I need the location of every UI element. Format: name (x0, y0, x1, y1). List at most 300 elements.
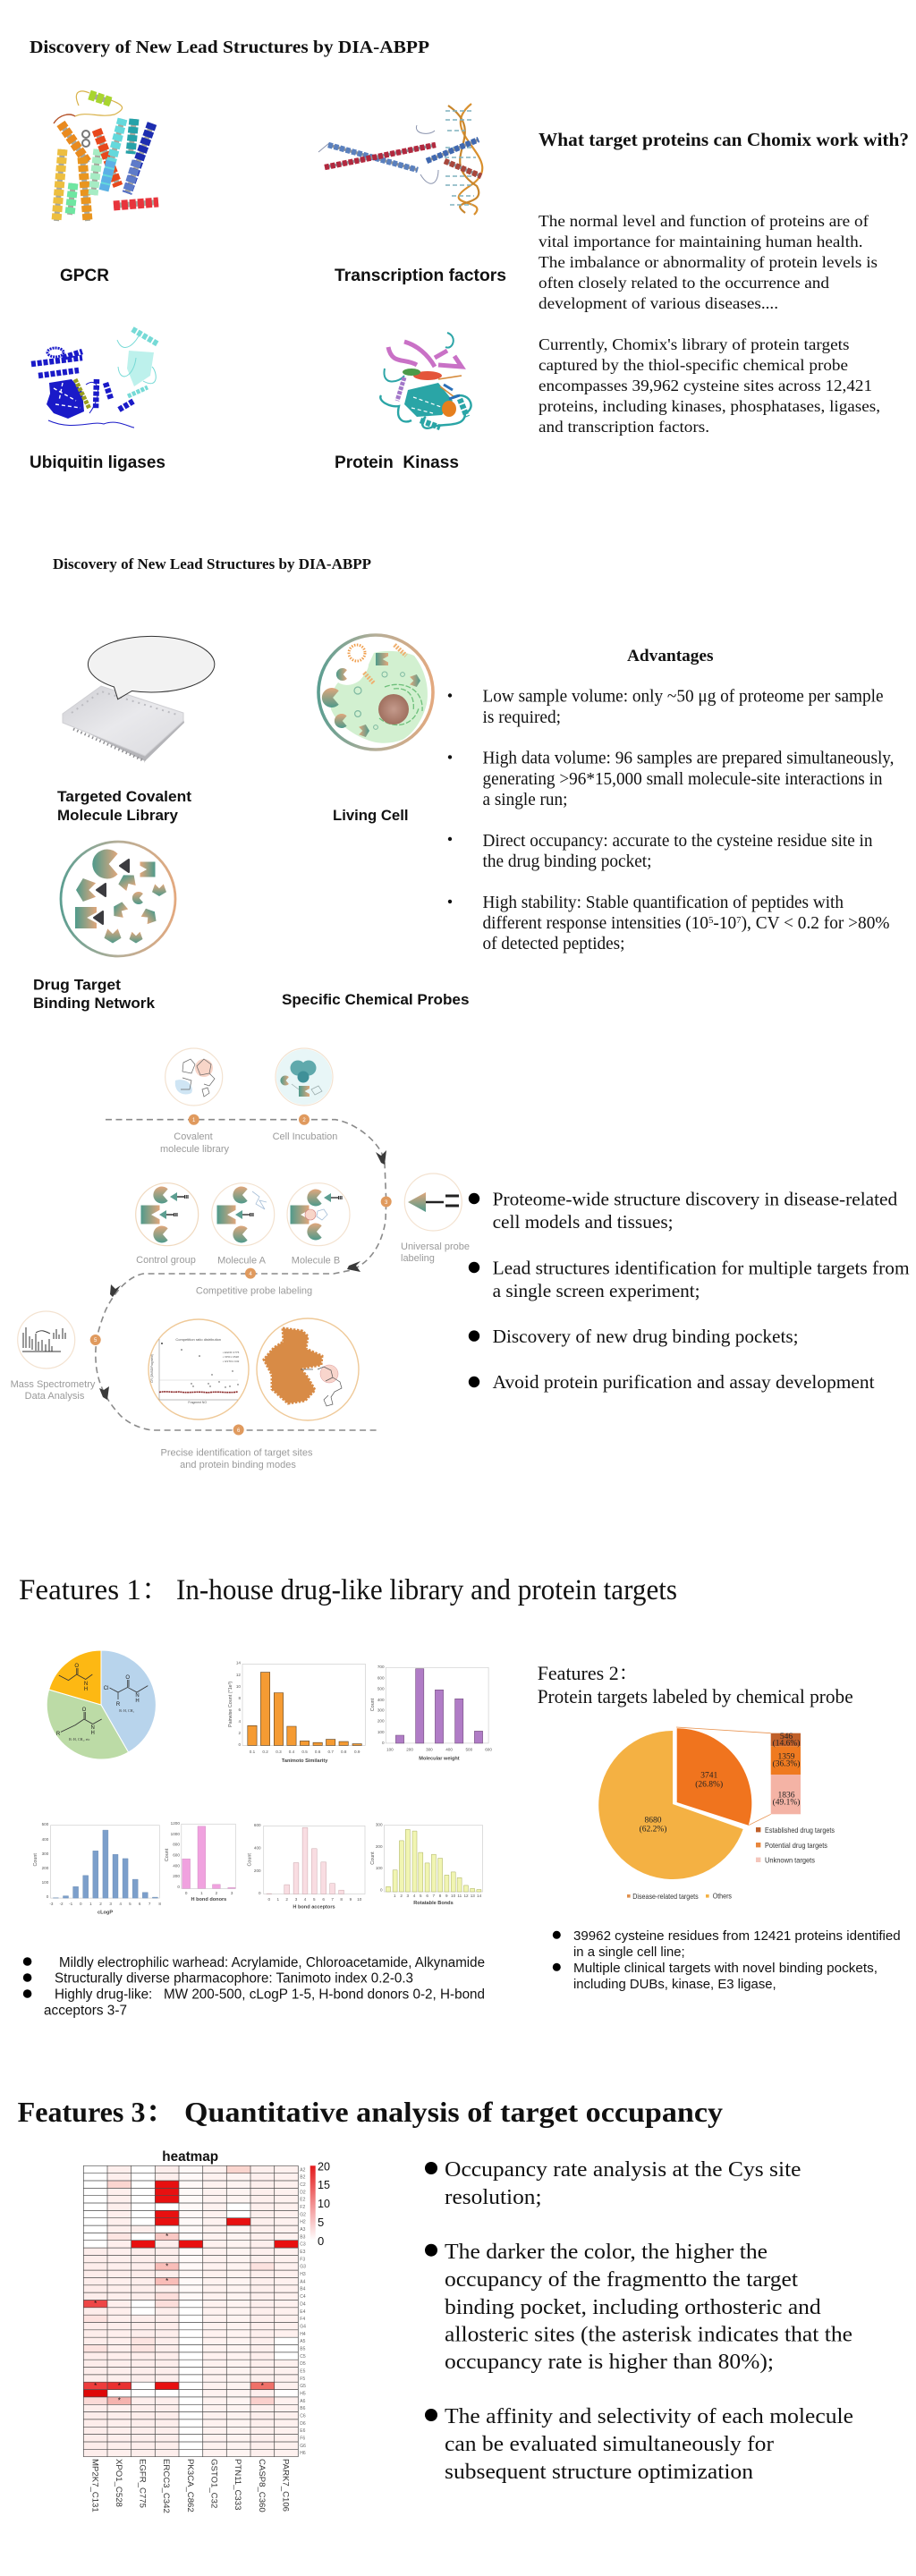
pie chart: protein targets: 8680 (644, 1816, 662, 1825)
heatmap row labels: D4 (300, 2301, 306, 2307)
list: advantages: High data volume: 96 samples are prepared simultaneously, (483, 750, 895, 767)
list: advantages: Low sample volume: only ~50 μg of proteome per sample (483, 687, 884, 707)
bar chart: rotatable bonds: 200 (376, 1844, 383, 1849)
heatmap row labels: B3 (300, 2234, 306, 2240)
pie chart: warhead types: H (91, 1731, 95, 1736)
text block: protein function paragraph: often closely related to the occurrence and (539, 274, 829, 292)
bar chart: molecular weight: 100 (386, 1748, 394, 1751)
label: GPCR: GPCR (60, 267, 109, 285)
step 6: competition ratio chart: CR (DMSO/Fragment) (150, 1354, 154, 1383)
icon: drug target binding network (61, 842, 175, 956)
heatmap column labels: GSTO1_C32 (209, 2459, 218, 2508)
bar chart: H bond donors: 400 (173, 1864, 180, 1868)
list: library properties (23, 1955, 485, 2018)
list: advantages: different response intensities (10 (483, 914, 710, 933)
bar chart: tanimoto similarity: Tanimoto Similarity (282, 1758, 328, 1764)
bar chart: H bond acceptors: 0 (259, 1891, 261, 1895)
heatmap column labels: CASP8_C360 (257, 2459, 267, 2512)
heatmap column labels: PK3CA_C862 (185, 2459, 195, 2512)
bar chart: cLogP: 200 (42, 1866, 49, 1870)
bar chart: rotatable bonds: 1 (394, 1894, 396, 1898)
heatmap row labels: G4 (300, 2324, 306, 2329)
bar chart: tanimoto similarity: 0.3 (276, 1750, 282, 1754)
pie chart: warhead types (47, 1650, 156, 1759)
bar chart: molecular weight: 200 (406, 1748, 413, 1751)
heatmap cells (83, 2165, 298, 2457)
list: advantages: of detected peptides; (483, 935, 624, 953)
step 3: universal probe labeling (404, 1174, 462, 1231)
bar chart: H bond acceptors: 200 (254, 1868, 261, 1873)
heatmap row labels: H5 (300, 2392, 306, 2397)
heatmap row labels: E4 (300, 2309, 306, 2315)
heatmap row labels: C4 (300, 2294, 306, 2300)
bar chart: tanimoto similarity: 14 (236, 1660, 241, 1665)
heatmap row labels: H4 (300, 2332, 306, 2337)
arrow path: dashed workflow line (96, 1120, 386, 1430)
bar chart: molecular weight: 500 (465, 1748, 473, 1751)
text block: library coverage paragraph: proteins, including kinases, phosphatases, ligases, (539, 397, 880, 415)
legend: drug target classes (756, 1826, 835, 1864)
list: occupancy analysis points: occupancy rate is higher than 80%); (445, 2351, 774, 2374)
pie chart: protein targets: 546 (780, 1733, 793, 1741)
bar chart: H bond donors: 0 (185, 1891, 188, 1895)
bar chart: H bond acceptors (247, 1823, 365, 1910)
bar chart: H bond acceptors: Count (247, 1853, 252, 1866)
list: occupancy analysis points: occupancy of the fragmentto the target (445, 2268, 798, 2292)
bar chart: tanimoto similarity: Pairwise Count (*1e³) (228, 1682, 233, 1727)
bar chart: H bond donors: 1200 (171, 1821, 180, 1826)
heading: features 2: Features 2： (538, 1662, 639, 1684)
text block: library coverage paragraph: and transcription factors. (539, 418, 709, 436)
heatmap row labels: C6 (300, 2413, 306, 2419)
step nodes 1 to 6: 2 (302, 1118, 306, 1123)
bar chart: molecular weight (370, 1665, 492, 1762)
bar chart: cLogP: 0 (80, 1902, 82, 1906)
label: drug target binding network: Drug Target (33, 977, 121, 993)
bar chart: rotatable bonds: 3 (407, 1894, 410, 1898)
step 6: competition ratio chart (148, 1319, 249, 1419)
bar chart: cLogP: 5 (129, 1902, 131, 1906)
heatmap row labels: A6 (300, 2399, 306, 2404)
heatmap row labels: F4 (300, 2317, 305, 2322)
bar chart: tanimoto similarity: 0.8 (341, 1750, 347, 1754)
pie chart: warhead types: O (74, 1664, 79, 1669)
list: occupancy analysis points: can be evaluated simultaneously for (445, 2433, 774, 2456)
heatmap column labels: XPO1_C528 (114, 2459, 123, 2507)
bar chart: cLogP: 100 (42, 1880, 49, 1885)
pie chart: warhead types: R: H, CH₃, etc (69, 1737, 90, 1742)
step 3 label (401, 1241, 470, 1264)
step 5 label: Data Analysis (25, 1391, 85, 1402)
icon: GPCR protein structure (54, 91, 158, 221)
bar chart: cLogP: 4 (119, 1902, 122, 1906)
list: occupancy analysis points (425, 2158, 853, 2484)
bar chart: H bond donors: 600 (173, 1853, 180, 1857)
heatmap row labels: B2 (300, 2175, 306, 2181)
bar chart: cLogP: -3 (49, 1902, 54, 1906)
heatmap column labels: ERCC3_C342 (161, 2459, 171, 2513)
pie chart: warhead types: R (56, 1732, 61, 1737)
list: advantages: High stability: Stable quantification of peptides with (483, 894, 844, 912)
pie chart: protein targets: 1836 (778, 1791, 795, 1800)
icon: 96-well plate with speech bubble (63, 636, 215, 761)
text block: protein function paragraph: The imbalance or abnormality of protein levels is (539, 253, 878, 271)
step 4: molecule B (287, 1183, 350, 1246)
step 5 label (11, 1379, 96, 1402)
section: features 3 (18, 2096, 853, 2513)
heatmap colour legend: 20 (318, 2159, 330, 2174)
icon: living cell (318, 635, 433, 750)
asterisks for occupancy above 80 percent: * (94, 2382, 97, 2390)
heading: features 1: Features 1： (19, 1574, 171, 1606)
bar chart: H bond donors: 200 (173, 1874, 180, 1878)
heatmap row labels: H6 (300, 2451, 306, 2456)
asterisks for occupancy above 80 percent: * (261, 2382, 264, 2390)
step nodes 1 to 6: 6 (237, 1428, 241, 1434)
asterisks for occupancy above 80 percent (94, 2233, 264, 2404)
list: occupancy analysis points: binding pocket, including orthosteric and (445, 2296, 821, 2319)
text block: library coverage paragraph: encompasses 39,962 cysteine sites across 12,421 (539, 377, 872, 394)
bar chart: H bond acceptors: 5 (313, 1897, 316, 1902)
asterisks for occupancy above 80 percent: * (118, 2397, 121, 2404)
asterisks for occupancy above 80 percent: * (165, 2233, 168, 2241)
bar chart: molecular weight: 600 (485, 1748, 492, 1751)
bar chart: rotatable bonds: 300 (376, 1823, 383, 1826)
list: occupancy analysis points: allosteric sites (the asterisk indicates that the (445, 2324, 852, 2347)
label: living cell: Living Cell (333, 807, 408, 824)
bar chart: molecular weight: 600 (377, 1676, 385, 1680)
step 6: protein binding mode (257, 1318, 359, 1420)
step 6: competition ratio chart: ▪ EGFR C775 (223, 1351, 240, 1354)
bar chart: cLogP: Count (33, 1853, 38, 1866)
heatmap row labels: A2 (300, 2167, 306, 2173)
bar chart: H bond donors: 2 (216, 1891, 218, 1895)
bar chart: molecular weight: 300 (377, 1708, 385, 1713)
legend: drug target classes: Unknown targets (765, 1855, 815, 1864)
bar chart: rotatable bonds: 7 (433, 1894, 436, 1898)
step 2 label: Cell Incubation (273, 1131, 337, 1142)
pie chart: protein targets: 3741 (700, 1771, 717, 1780)
text block: library coverage paragraph: captured by the thiol-specific chemical probe (539, 356, 848, 374)
bar chart: molecular weight: 100 (377, 1730, 385, 1734)
bar chart: cLogP: cLogP (98, 1911, 113, 1916)
heading: features 3: Features 3： (18, 2096, 174, 2128)
bar chart: H bond donors: Count (165, 1848, 170, 1861)
heatmap row labels: G2 (300, 2212, 306, 2217)
step 6: competition ratio chart: ▪ GSTO1 C32 (223, 1360, 240, 1363)
section: workflow diagram (11, 1048, 910, 1470)
list: library properties: acceptors 3-7 (44, 2004, 127, 2018)
bar chart: cLogP: 1 (89, 1902, 92, 1906)
heatmap column labels: PARK7_C106 (281, 2459, 290, 2512)
label: ubiquitin ligases: Ubiquitin ligases (30, 453, 165, 472)
step nodes 1 to 6: 4 (249, 1272, 252, 1277)
heatmap column labels: MP2K7_C131 (89, 2459, 100, 2512)
heading: features 1: In-house drug-like library and protein targets (176, 1574, 677, 1606)
pie chart: protein targets: 1359 (778, 1753, 795, 1762)
step 4 labels (136, 1255, 340, 1297)
label: transcription factors: Transcription factors (335, 267, 506, 285)
pie chart: protein targets: (62.2%) (640, 1825, 666, 1834)
legend: drug target classes: Established drug targets (765, 1826, 835, 1835)
step 4 labels: Molecule A (217, 1256, 267, 1267)
bar chart: molecular weight: 400 (377, 1698, 385, 1702)
bar chart: tanimoto similarity: 0.7 (328, 1750, 334, 1754)
heading: discovery by DIA-ABPP: Discovery of New Lead Structures by DIA-ABPP (53, 555, 371, 572)
step 1 label (160, 1131, 230, 1155)
step 6: competition ratio chart: ▪ XPO1 C528 (223, 1355, 239, 1359)
list: advantages: ), CV < 0.2 for >80% (742, 914, 889, 933)
heatmap row labels: G5 (300, 2384, 306, 2389)
list: workflow benefits: Lead structures identification for multiple targets from (493, 1258, 910, 1279)
bar chart: rotatable bonds: Count (370, 1852, 376, 1865)
step 3 label: labeling (401, 1253, 435, 1264)
bar chart: molecular weight: 0 (382, 1741, 385, 1745)
list: advantages: 5 (708, 915, 714, 926)
list: library properties: Structurally diverse pharmacophore: Tanimoto index 0.2-0.3 (55, 1971, 413, 1986)
step 5: mass spectrometry (18, 1311, 75, 1368)
label: targeted covalent molecule library (57, 788, 191, 824)
bar chart: H bond acceptors: 4 (304, 1897, 307, 1902)
list: protein target findings (553, 1929, 901, 1992)
heatmap column labels: PTN11_C333 (233, 2459, 242, 2510)
bar chart: H bond acceptors: 600 (254, 1823, 261, 1827)
step 5 label: Mass Spectrometry (11, 1379, 96, 1390)
bar chart: cLogP: -1 (69, 1902, 73, 1906)
bar chart: molecular weight: 300 (426, 1748, 433, 1751)
heatmap colour legend: 5 (318, 2216, 324, 2229)
pie chart: warhead types: N (84, 1682, 88, 1687)
bar chart: rotatable bonds: 6 (426, 1894, 428, 1898)
list: library properties: Highly drug-like: MW 200-500, cLogP 1-5, H-bond donors 0-2, H-bond (55, 1987, 485, 2002)
pie chart: warhead types: N (91, 1725, 95, 1731)
bar chart: rotatable bonds: 5 (420, 1894, 422, 1898)
bar chart: molecular weight: Count (370, 1698, 376, 1711)
bar chart: cLogP: 3 (109, 1902, 112, 1906)
pie chart: warhead types: H (84, 1687, 88, 1692)
text block: library coverage paragraph: Currently, Chomix's library of protein targets (539, 335, 850, 353)
bar chart: H bond acceptors: 9 (350, 1897, 352, 1902)
heatmap row labels: B4 (300, 2287, 306, 2292)
list: advantages: generating >96*15,000 small molecule-site interactions in (483, 770, 883, 789)
bar chart: tanimoto similarity: 0.5 (301, 1750, 308, 1754)
heatmap colour legend: 10 (318, 2197, 330, 2210)
heatmap row labels: H2 (300, 2220, 306, 2225)
heatmap column labels: EGFR_C775 (138, 2459, 147, 2508)
step nodes 1 to 6 (90, 1114, 392, 1435)
list: occupancy analysis points: The darker the color, the higher the (445, 2241, 768, 2264)
bar chart: tanimoto similarity: 0 (238, 1742, 241, 1747)
heading: what target proteins: What target proteins can Chomix work with? (539, 129, 909, 150)
pie chart: protein targets: (14.6%) (773, 1739, 800, 1748)
bar chart: H bond acceptors: 8 (340, 1897, 343, 1902)
list: advantages: -10 (713, 914, 736, 933)
pie chart: protein targets: (26.8%) (695, 1780, 723, 1789)
heatmap row labels: F6 (300, 2436, 305, 2442)
legend: drug target classes: Potential drug targets (765, 1841, 827, 1850)
pie chart: warhead types: O (82, 1707, 87, 1713)
icon: ubiquitin ligase structure (31, 329, 158, 428)
label: protein kinase: Protein Kinass (335, 453, 459, 472)
list: advantages: 7 (736, 915, 742, 926)
bar chart: tanimoto similarity: 8 (238, 1696, 241, 1700)
bar chart: tanimoto similarity: 10 (236, 1684, 241, 1689)
heatmap: target occupancy (83, 2149, 330, 2513)
heatmap row labels: F5 (300, 2377, 305, 2382)
bar chart: cLogP: 300 (42, 1852, 49, 1856)
bar chart: cLogP: 2 (99, 1902, 102, 1906)
step 2: cell incubation (276, 1048, 333, 1106)
bar chart: tanimoto similarity: 6 (238, 1707, 241, 1712)
bar chart: cLogP: 500 (42, 1822, 49, 1826)
bar chart: H bond acceptors: 2 (285, 1897, 288, 1902)
bar chart: tanimoto similarity: 4 (238, 1719, 241, 1724)
list: protein target findings: including DUBs, kinase, E3 ligase, (573, 1978, 776, 1992)
heatmap colour legend: 15 (318, 2178, 330, 2191)
bar chart: rotatable bonds (370, 1823, 483, 1906)
bar chart: rotatable bonds: 11 (457, 1894, 462, 1898)
bar chart: tanimoto similarity: 0.1 (250, 1750, 256, 1754)
pie chart: protein targets: (49.1%) (773, 1798, 800, 1807)
pie chart: warhead types: O (125, 1675, 130, 1681)
bar chart: cLogP (33, 1822, 161, 1916)
heading: discovery of new lead structures: Discovery of New Lead Structures by DIA-ABPP (30, 38, 429, 57)
text block: library coverage paragraph (539, 335, 880, 436)
heading: features 2: Protein targets labeled by chemical probe (538, 1685, 853, 1707)
text block: protein function paragraph: vital importance for maintaining human health. (539, 233, 862, 250)
step 1: covalent molecule library (165, 1048, 223, 1106)
asterisks for occupancy above 80 percent: * (94, 2300, 97, 2308)
icon: transcription factor bound to DNA (318, 104, 482, 215)
bar chart: rotatable bonds: 4 (413, 1894, 416, 1898)
pie chart: warhead types: R (116, 1702, 121, 1707)
heatmap row labels: C3 (300, 2242, 306, 2248)
list: workflow benefits: Avoid protein purification and assay development (493, 1371, 875, 1393)
bar chart: molecular weight: 200 (377, 1719, 385, 1724)
text block: protein function paragraph: development of various diseases.... (539, 294, 778, 312)
heading: advantages: Advantages (627, 647, 714, 665)
bar chart: H bond acceptors: 1 (277, 1897, 280, 1902)
step nodes 1 to 6: 3 (385, 1200, 388, 1206)
bar chart: cLogP: 0 (47, 1894, 49, 1899)
bar chart: rotatable bonds: 100 (376, 1866, 383, 1870)
heatmap column labels (89, 2459, 290, 2513)
heatmap row labels: F3 (300, 2257, 305, 2262)
bar chart: H bond donors: H bond donors (191, 1897, 226, 1902)
step 6: competition ratio chart: Fragment NO (188, 1401, 207, 1404)
heatmap row labels: G6 (300, 2444, 306, 2449)
step 6 label: and protein binding modes (180, 1460, 296, 1470)
list: library properties: Mildly electrophilic warhead: Acrylamide, Chloroacetamide, Alkynamide (59, 1955, 485, 1970)
bar chart: H bond acceptors: 3 (295, 1897, 298, 1902)
bar chart: rotatable bonds: 2 (400, 1894, 403, 1898)
bar chart: cLogP: 400 (42, 1837, 49, 1842)
heatmap row labels: E5 (300, 2368, 306, 2374)
bar chart: H bond donors: 0 (177, 1885, 180, 1889)
step 4 labels: Competitive probe labeling (196, 1286, 312, 1297)
list: workflow benefits: Proteome-wide structure discovery in disease-related (493, 1188, 898, 1209)
heatmap row labels: A5 (300, 2339, 306, 2344)
list: advantages: the drug binding pocket; (483, 852, 651, 871)
list: protein target findings: 39962 cysteine residues from 12421 proteins identified (573, 1929, 901, 1944)
label: targeted covalent molecule library: Molecule Library (57, 807, 179, 824)
pie chart: protein targets (598, 1727, 801, 1879)
heatmap row labels: D2 (300, 2190, 306, 2195)
bar chart: cLogP: 6 (139, 1902, 141, 1906)
bar chart: tanimoto similarity (228, 1660, 365, 1764)
icon: protein kinase structure (380, 333, 471, 428)
asterisks for occupancy above 80 percent: * (165, 2263, 168, 2270)
heatmap row labels: E3 (300, 2250, 306, 2255)
heatmap row labels: D5 (300, 2361, 306, 2367)
section: features 1 (19, 1574, 677, 2018)
bar chart: molecular weight: 700 (377, 1665, 385, 1669)
text block: protein function paragraph (539, 212, 878, 312)
bar chart: rotatable bonds: Rotatable Bonds (413, 1901, 454, 1906)
label: drug target binding network: Binding Network (33, 995, 156, 1012)
heatmap colour legend: 0 (318, 2234, 324, 2248)
step nodes 1 to 6: 1 (192, 1118, 196, 1123)
heatmap row labels: B6 (300, 2406, 306, 2411)
bar chart: H bond acceptors: 10 (357, 1897, 362, 1902)
list: workflow benefits: cell models and tissues; (493, 1211, 674, 1233)
pie chart: warhead types: H (135, 1699, 140, 1704)
bar chart: cLogP: -2 (59, 1902, 64, 1906)
bar chart: H bond acceptors: 7 (331, 1897, 334, 1902)
asterisks for occupancy above 80 percent: * (165, 2277, 168, 2285)
step 1 label: molecule library (160, 1144, 230, 1155)
section: features 2 (538, 1662, 901, 1992)
heatmap row labels: H3 (300, 2272, 306, 2277)
bar chart: tanimoto similarity: 2 (238, 1731, 241, 1735)
heatmap row labels (300, 2167, 306, 2456)
heatmap row labels: C2 (300, 2182, 306, 2188)
heatmap row labels: D6 (300, 2421, 306, 2427)
bar chart: tanimoto similarity: 12 (236, 1673, 241, 1677)
list: occupancy analysis points: subsequent structure optimization (445, 2461, 753, 2484)
bar chart: rotatable bonds: 13 (471, 1894, 475, 1898)
arrowheads on workflow line (99, 1150, 386, 1400)
list: workflow benefits: Discovery of new drug binding pockets; (493, 1326, 799, 1347)
text block: protein function paragraph: The normal level and function of proteins are of (539, 212, 869, 230)
heatmap row labels: E6 (300, 2428, 306, 2434)
label: specific chemical probes: Specific Chemical Probes (282, 991, 469, 1008)
step 4 labels: Control group (136, 1255, 196, 1266)
list: occupancy analysis points: Occupancy rate analysis at the Cys site (445, 2158, 802, 2182)
bar chart: tanimoto similarity: 0.2 (262, 1750, 268, 1754)
heatmap row labels: A3 (300, 2227, 306, 2233)
heatmap title: heatmap (162, 2149, 218, 2165)
step 6 label: Precise identification of target sites (161, 1447, 313, 1458)
list: workflow benefits: a single screen experiment; (493, 1280, 700, 1301)
heatmap row labels: B5 (300, 2347, 306, 2352)
bar chart: tanimoto similarity: 0.6 (315, 1750, 321, 1754)
bar chart: H bond donors: 3 (231, 1891, 233, 1895)
bar chart: H bond acceptors: 6 (322, 1897, 325, 1902)
bar chart: H bond donors (165, 1821, 235, 1902)
heatmap row labels: E2 (300, 2198, 306, 2203)
bar chart: H bond acceptors: 0 (268, 1897, 271, 1902)
label: drug target binding network (33, 977, 156, 1012)
heatmap colour legend (310, 2159, 330, 2248)
bar chart: rotatable bonds: 12 (463, 1894, 469, 1898)
step 4: molecule A (212, 1183, 275, 1246)
bar chart: rotatable bonds: 8 (439, 1894, 442, 1898)
step 1 label: Covalent (174, 1131, 213, 1142)
bar chart: tanimoto similarity: 0.9 (354, 1750, 360, 1754)
list: advantages: is required; (483, 708, 561, 727)
bar chart: H bond donors: 1000 (171, 1832, 180, 1836)
